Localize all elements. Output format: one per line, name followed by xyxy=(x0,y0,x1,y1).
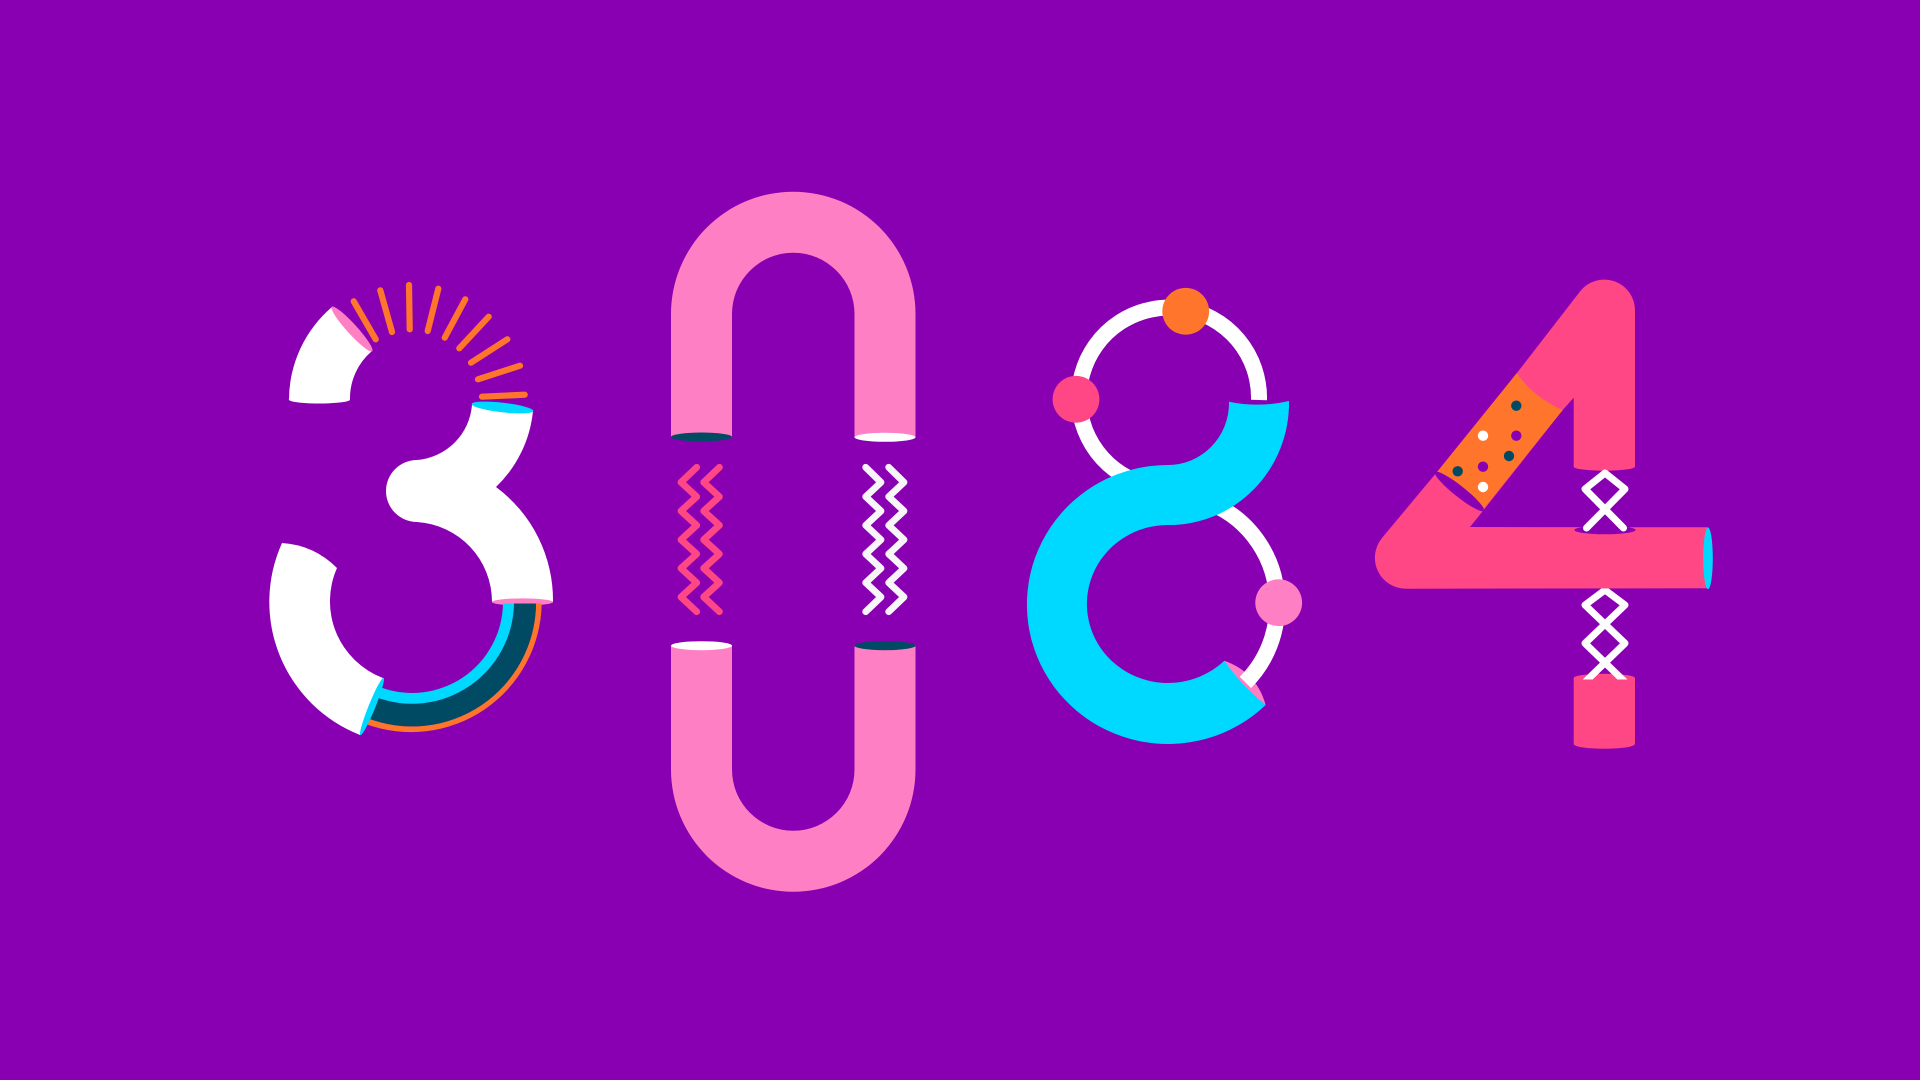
pink ball xyxy=(1255,579,1302,626)
purple hole on bar xyxy=(1574,526,1636,534)
white opening bottom left xyxy=(671,641,732,650)
bottom pink arch xyxy=(671,646,916,892)
bottom-left white tube xyxy=(269,543,383,735)
hot pink zigzags xyxy=(681,467,719,612)
digit 8 second form: cyan tube xyxy=(1027,288,1302,744)
cyan tube opening right xyxy=(1703,528,1713,589)
teal opening top left xyxy=(671,432,732,442)
vertical tube lip xyxy=(1574,463,1635,471)
lower white ring lower half xyxy=(1245,603,1277,682)
cyan S tube xyxy=(1027,401,1289,744)
lower white ring upper half xyxy=(1210,503,1277,603)
digit 4 xyxy=(1375,280,1713,749)
pink tube opening xyxy=(1224,661,1266,705)
striped lower arc xyxy=(365,604,542,732)
main pink body xyxy=(1375,280,1708,589)
lower white lattice xyxy=(1585,590,1625,682)
digit 8 first form: pink U tubes xyxy=(671,192,916,892)
hot pink ball xyxy=(1053,376,1099,423)
upper white ring xyxy=(1079,308,1259,481)
orange sun rays xyxy=(354,285,525,397)
purple tube opening xyxy=(1432,468,1487,515)
top-left white tube xyxy=(289,307,372,404)
pink tube opening xyxy=(328,303,376,355)
pink tube opening bottom xyxy=(492,598,553,606)
canvas: number artwork xyxy=(269,192,1713,892)
white opening top right xyxy=(854,433,916,442)
upper white lattice xyxy=(1585,473,1625,528)
cyan tube opening lower xyxy=(357,676,387,737)
middle white tube xyxy=(386,405,553,602)
orange ball xyxy=(1162,288,1209,335)
teal opening bottom right xyxy=(854,641,916,650)
cyan tube opening xyxy=(471,399,534,416)
orange dotted section xyxy=(1437,373,1563,509)
white zigzags xyxy=(866,467,904,612)
digit 3 xyxy=(269,285,553,737)
top pink arch xyxy=(671,192,916,437)
bottom pink cylinder xyxy=(1574,674,1635,749)
dots xyxy=(1452,400,1522,492)
